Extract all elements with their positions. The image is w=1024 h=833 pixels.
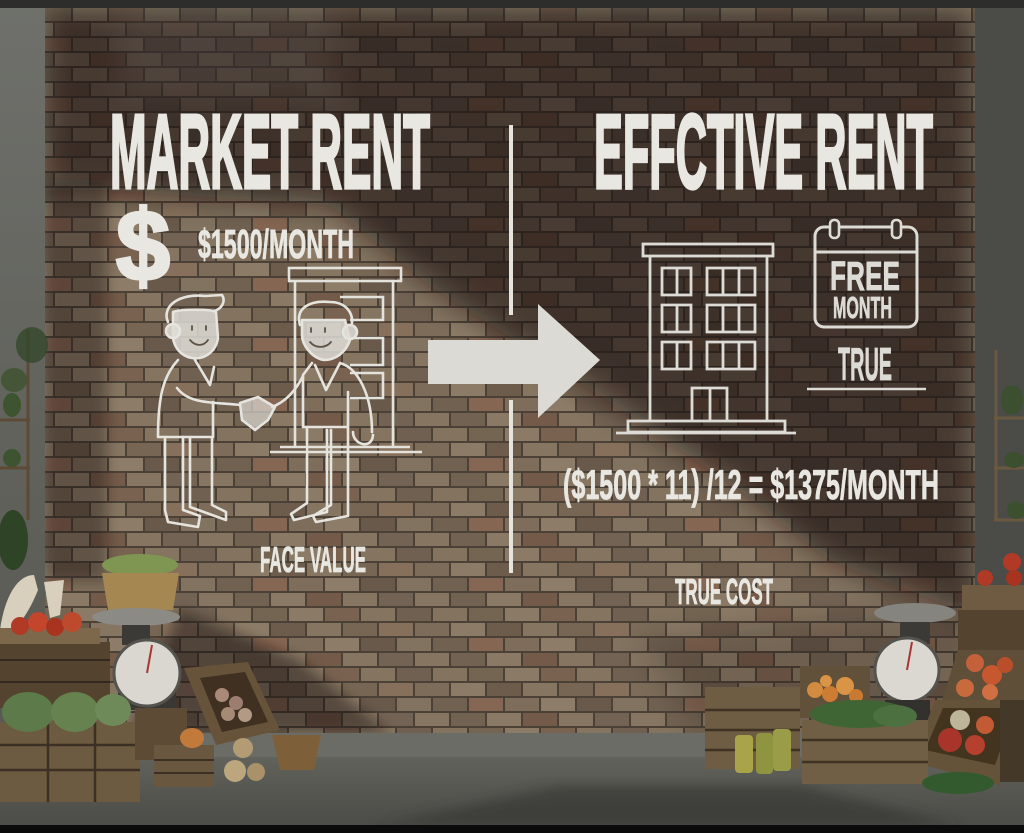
right plants on shelf bbox=[994, 350, 1024, 520]
icon: free month calendar bbox=[815, 220, 917, 327]
basket bbox=[272, 735, 321, 770]
left produce stall bbox=[0, 554, 321, 802]
icon: apartment building bbox=[616, 244, 796, 433]
text: TRUE COST bbox=[675, 571, 773, 612]
wall shadows bbox=[45, 8, 975, 733]
hanging scale bbox=[92, 608, 180, 626]
text: FACE VALUE bbox=[260, 539, 366, 580]
potato crate bbox=[184, 662, 280, 745]
tomato crate bbox=[0, 642, 110, 708]
bottles bbox=[735, 735, 753, 773]
arrow bbox=[428, 304, 600, 418]
left plants on shelf bbox=[0, 327, 48, 570]
icon: free month calendar: MONTH bbox=[833, 290, 892, 325]
illustration: two men shaking hands bbox=[158, 295, 373, 527]
greens on floor bbox=[922, 772, 994, 794]
top right crate bbox=[962, 585, 1024, 610]
icon: building behind handshake bbox=[270, 268, 422, 452]
label: true with underline bbox=[807, 338, 926, 390]
left man bbox=[158, 295, 240, 527]
wicker basket with greens bbox=[102, 554, 178, 576]
icon: free month calendar: FREE bbox=[830, 253, 900, 299]
stacked crate bbox=[705, 687, 800, 769]
cabbage crate bbox=[0, 722, 140, 802]
scale bbox=[874, 603, 956, 623]
price: market rent per month: $1500/MONTH bbox=[198, 221, 354, 267]
greens crate bbox=[802, 720, 928, 784]
divider line bbox=[509, 125, 513, 573]
right produce stall bbox=[705, 553, 1024, 794]
orange crate bbox=[800, 666, 870, 718]
potatoes on floor bbox=[233, 738, 253, 758]
handshake bbox=[240, 397, 275, 430]
ground: plinth and pavement bbox=[0, 733, 1024, 833]
small crates bbox=[135, 708, 187, 760]
white radishes bbox=[0, 575, 64, 630]
label: true with underline: TRUE bbox=[838, 338, 892, 390]
tomato crates bbox=[942, 650, 1024, 705]
icon: dollar sign: $ bbox=[116, 190, 170, 302]
text: MARKET RENT bbox=[110, 93, 430, 211]
right man bbox=[272, 302, 373, 522]
